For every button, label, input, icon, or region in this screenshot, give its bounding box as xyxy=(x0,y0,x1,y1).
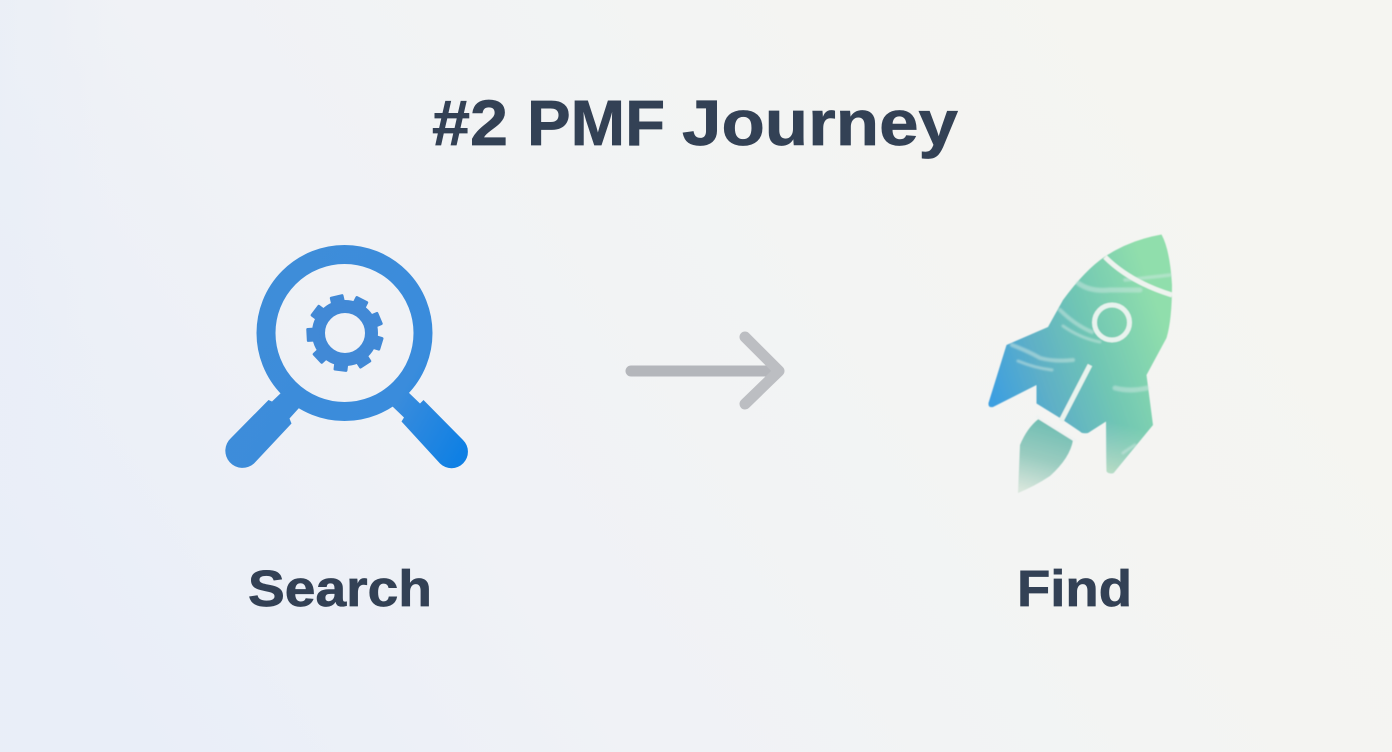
title xyxy=(432,87,958,159)
icon: magnifying glass with gear xyxy=(225,254,468,468)
title: PMF xyxy=(527,87,665,159)
label: Search: Search xyxy=(248,560,432,617)
right handle xyxy=(392,391,468,468)
title: #2 xyxy=(432,87,508,159)
flame gap xyxy=(1036,416,1076,441)
title: Journey xyxy=(682,87,958,159)
arrow xyxy=(631,337,779,404)
flame xyxy=(1018,419,1073,493)
label: Find: Find xyxy=(1017,560,1132,617)
surface streaks xyxy=(1012,275,1170,453)
lower fin fade xyxy=(1106,400,1153,473)
porthole xyxy=(1094,305,1130,340)
rocket body xyxy=(988,234,1172,473)
body line xyxy=(1061,365,1090,421)
lens ring xyxy=(266,254,423,412)
gear xyxy=(306,294,384,372)
left handle xyxy=(225,391,299,468)
icon: rocket xyxy=(988,234,1172,493)
nose divider xyxy=(1105,257,1172,295)
